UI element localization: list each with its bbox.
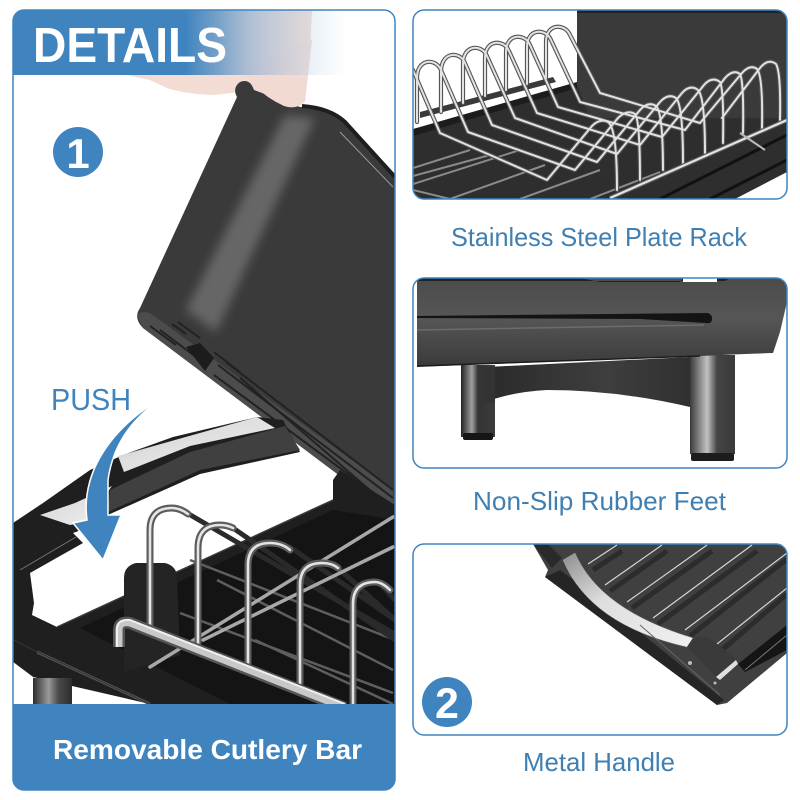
panel: non-slip rubber feet xyxy=(413,278,787,468)
corner cap xyxy=(640,625,787,695)
panel: removable cutlery bar xyxy=(13,10,395,790)
step 2 badge xyxy=(422,677,472,728)
tray underside xyxy=(533,544,787,705)
cutlery bar xyxy=(117,620,345,708)
panel border xyxy=(413,278,787,468)
panel: metal handle xyxy=(533,544,786,705)
caption band xyxy=(13,704,395,790)
panel border xyxy=(413,10,787,199)
step 1 badge: 1 xyxy=(66,130,90,177)
rack side rail xyxy=(417,278,787,367)
header band: details: DETAILS xyxy=(33,19,227,73)
tray ribs xyxy=(588,545,787,650)
arrow: push down xyxy=(72,408,148,558)
holder xyxy=(137,81,395,525)
right foot xyxy=(690,355,735,461)
panel border xyxy=(413,544,787,735)
hand fingers xyxy=(126,10,312,95)
support block xyxy=(124,563,180,672)
panel: stainless steel plate rack xyxy=(413,10,787,199)
tray xyxy=(413,77,787,199)
foot xyxy=(33,678,72,704)
caption: metal handle: Metal Handle xyxy=(523,747,675,777)
caption: rubber feet: Non-Slip Rubber Feet xyxy=(473,486,727,516)
caption band: Removable Cutlery Bar xyxy=(53,734,362,765)
metal strip xyxy=(563,553,693,647)
plate rack wires xyxy=(150,508,395,704)
step 2 badge: 2 xyxy=(435,680,459,728)
tray grooves xyxy=(180,560,395,704)
left panel border xyxy=(13,10,395,790)
header band: details xyxy=(13,10,345,75)
left foot xyxy=(461,365,495,440)
holder rear view xyxy=(577,13,786,118)
step 1 badge xyxy=(53,127,103,177)
push label: PUSH xyxy=(51,382,131,417)
wire plate rack xyxy=(413,27,787,198)
hand thumb xyxy=(263,40,312,108)
under arch xyxy=(483,357,690,407)
caption: plate rack: Stainless Steel Plate Rack xyxy=(451,222,748,252)
handle and tray body xyxy=(13,417,395,704)
